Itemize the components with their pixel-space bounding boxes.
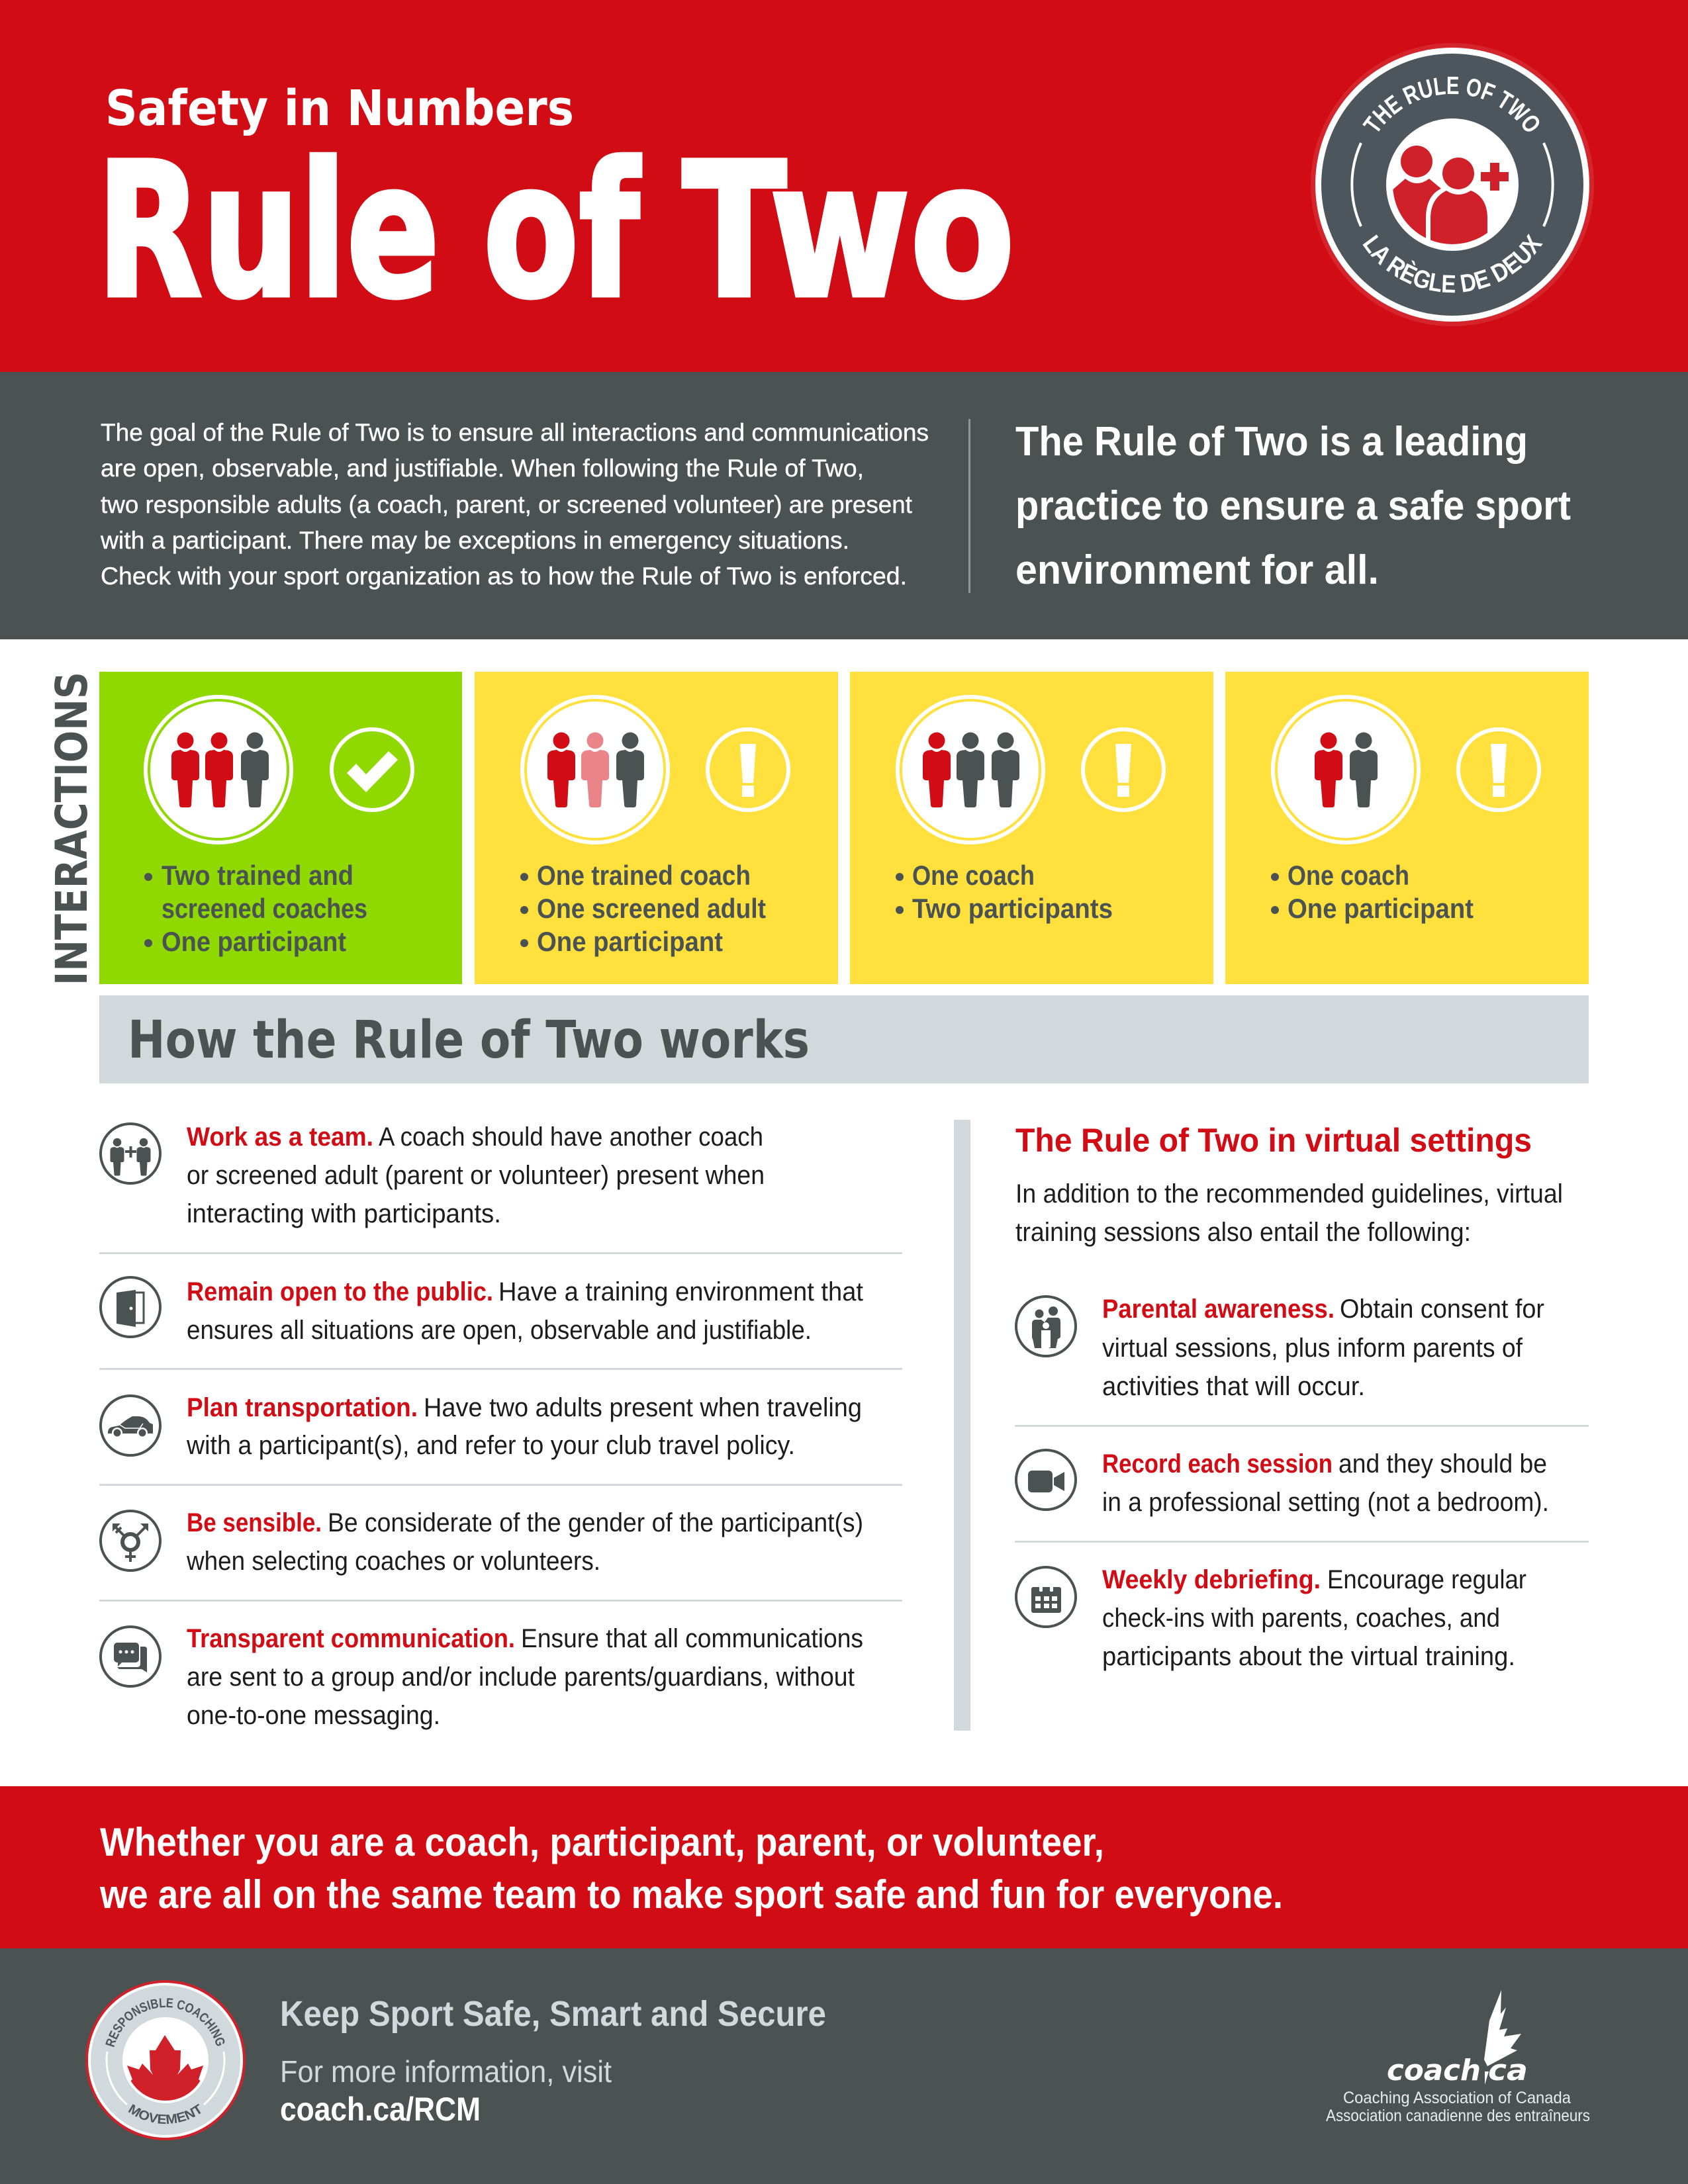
item: weekly debriefing: check-ins with parents, coaches, and — [1102, 1604, 1500, 1633]
panel: two coaches and one participant (green): screened coaches — [162, 893, 367, 924]
item: be sensible: Be sensible. — [187, 1508, 322, 1537]
icon: chat bubbles — [101, 1627, 160, 1686]
intro paragraph — [100, 419, 929, 590]
panel: one coach, one adult, one participant (yellow): One screened adult — [537, 893, 766, 924]
title: Rule of Two: Rule — [97, 124, 440, 340]
title: Rule of Two: Two — [682, 124, 1015, 340]
virtual settings heading: The Rule of Two in virtual settings — [1015, 1122, 1532, 1159]
item: weekly debriefing — [1016, 1565, 1526, 1671]
badge: Responsible Coaching Movement: MOVEMENT — [128, 2103, 201, 2124]
item: parental awareness: Obtain consent for — [1340, 1295, 1544, 1324]
icon: gender symbol — [101, 1511, 160, 1570]
icon: family — [1016, 1297, 1076, 1356]
logo: coach.ca: ca — [1488, 2054, 1528, 2087]
item: plan transportation: Have two adults present when traveling — [424, 1393, 862, 1422]
badge: The Rule of Two: LA RÈGLE DE DEUX — [1362, 234, 1543, 293]
badge: The Rule of Two: THE RULE OF TWO — [1362, 77, 1540, 132]
item: transparent communication: Transparent communication. — [187, 1624, 515, 1653]
item: parental awareness: activities that will occur. — [1102, 1372, 1365, 1401]
lead statement: The Rule of Two is a leading — [1015, 419, 1528, 465]
item: transparent communication — [101, 1624, 863, 1730]
badge: Responsible Coaching Movement: RESPONSIBLE COACHING — [105, 1998, 225, 2048]
item: parental awareness — [1016, 1295, 1544, 1401]
badge: The Rule of Two — [1311, 43, 1594, 326]
logo: coach.ca: Association canadienne des entraîneurs — [1326, 2107, 1590, 2125]
item: transparent communication: Ensure that all communications — [521, 1624, 863, 1653]
item: record each session: Record each session — [1102, 1449, 1333, 1479]
virtual settings intro: training sessions also entail the following: — [1015, 1218, 1471, 1247]
icon: open door — [101, 1277, 160, 1337]
item: remain open to the public — [101, 1277, 863, 1345]
item: work as a team: A coach should have another coach — [379, 1122, 763, 1152]
kicker: Safety in Numbers: Safety in Numbers — [105, 80, 574, 137]
lead statement: environment for all. — [1015, 547, 1379, 593]
item: work as a team — [101, 1122, 765, 1228]
item: plan transportation — [101, 1393, 862, 1460]
badge: Responsible Coaching Movement — [85, 1980, 246, 2140]
footer band — [0, 1948, 1688, 2184]
intro paragraph: with a participant. There may be exceptions in emergency situations. — [100, 527, 849, 554]
lead statement: practice to ensure a safe sport — [1015, 483, 1571, 529]
item: work as a team: Work as a team. — [187, 1122, 373, 1152]
item: plan transportation: with a participant(s), and refer to your club travel policy. — [186, 1431, 795, 1460]
virtual settings intro: In addition to the recommended guidelines, virtual — [1015, 1179, 1563, 1208]
item: remain open to the public: ensures all situations are open, observable and justifiable. — [187, 1316, 812, 1345]
panel: one coach, two participants (yellow): One coach — [912, 860, 1035, 891]
closing message band — [0, 1786, 1688, 1948]
section heading bar: How the Rule of Two works — [128, 1011, 810, 1070]
panel: one coach, one participant (yellow) — [1225, 672, 1589, 984]
panel: one coach, one participant (yellow): One participant — [1288, 893, 1474, 924]
title: Rule of Two — [97, 124, 1015, 340]
title: Rule of Two: of — [483, 124, 642, 340]
item: weekly debriefing: Encourage regular — [1327, 1565, 1526, 1594]
section heading bar — [99, 995, 1589, 1083]
item: transparent communication: one-to-one messaging. — [187, 1701, 440, 1730]
intro paragraph: two responsible adults (a coach, parent, or screened volunteer) are present — [101, 491, 913, 518]
icon: calendar — [1016, 1567, 1076, 1627]
item: parental awareness: Parental awareness. — [1102, 1295, 1335, 1324]
icon: car — [101, 1396, 160, 1455]
item: be sensible: Be considerate of the gender of the participant(s) — [328, 1508, 863, 1537]
panel: one coach, one participant (yellow): One coach — [1288, 860, 1409, 891]
item: weekly debriefing: Weekly debriefing. — [1102, 1565, 1321, 1594]
virtual settings intro — [1015, 1179, 1563, 1247]
intro paragraph: are open, observable, and justifiable. When following the Rule of Two, — [101, 455, 864, 482]
item: remain open to the public: Have a training environment that — [498, 1277, 863, 1306]
item: plan transportation: Plan transportation. — [187, 1393, 418, 1422]
panel: one coach, one adult, one participant (yellow) — [475, 672, 838, 984]
item: work as a team: interacting with participants. — [187, 1199, 501, 1228]
closing message band: we are all on the same team to make sport safe and fun for everyone. — [99, 1872, 1283, 1917]
panel: one coach, one adult, one participant (yellow): One participant — [537, 926, 723, 957]
footer tagline: Keep Sport Safe, Smart and Secure — [280, 1994, 826, 2034]
intro paragraph: Check with your sport organization as to how the Rule of Two is enforced. — [101, 563, 907, 590]
item: weekly debriefing: participants about the virtual training. — [1102, 1642, 1515, 1671]
footer link text: For more information, visit — [280, 2054, 612, 2089]
closing message band: Whether you are a coach, participant, parent, or volunteer, — [100, 1820, 1104, 1864]
panel: one coach, two participants (yellow): Two participants — [912, 893, 1113, 924]
footer link text — [280, 2054, 612, 2128]
item: record each session: in a professional setting (not a bedroom). — [1102, 1488, 1549, 1517]
item: remain open to the public: Remain open to the public. — [187, 1277, 493, 1306]
side heading: INTERACTIONS: INTERACTIONS — [46, 672, 97, 985]
item: transparent communication: are sent to a group and/or include parents/guardians, without — [187, 1662, 855, 1692]
logo: coach.ca: Coaching Association of Canada — [1343, 2089, 1571, 2107]
intro band — [0, 372, 1688, 639]
item: be sensible — [101, 1508, 863, 1576]
icon: video camera — [1016, 1450, 1076, 1510]
panel: two coaches and one participant (green): Two trained and — [162, 860, 353, 891]
panel: one coach, one adult, one participant (yellow): One trained coach — [537, 860, 751, 891]
lead statement — [1015, 419, 1571, 593]
list dividers — [99, 1120, 1589, 1731]
header band — [0, 0, 1688, 372]
intro paragraph: The goal of the Rule of Two is to ensure all interactions and communications — [101, 419, 929, 446]
logo: coach.ca: coach — [1387, 2054, 1481, 2087]
panel: one coach, two participants (yellow) — [850, 672, 1213, 984]
item: record each session — [1016, 1449, 1549, 1517]
item: record each session: and they should be — [1338, 1449, 1547, 1479]
panel: two coaches and one participant (green) — [99, 672, 462, 984]
icon: two people and plus — [101, 1124, 160, 1183]
logo: coach.ca — [1326, 1990, 1590, 2125]
item: work as a team: or screened adult (parent or volunteer) present when — [187, 1161, 765, 1190]
footer link text: coach.ca/RCM — [280, 2091, 481, 2128]
item: be sensible: when selecting coaches or volunteers. — [186, 1547, 600, 1576]
item: parental awareness: virtual sessions, plus inform parents of — [1102, 1334, 1523, 1363]
panel: two coaches and one participant (green): One participant — [162, 926, 346, 957]
